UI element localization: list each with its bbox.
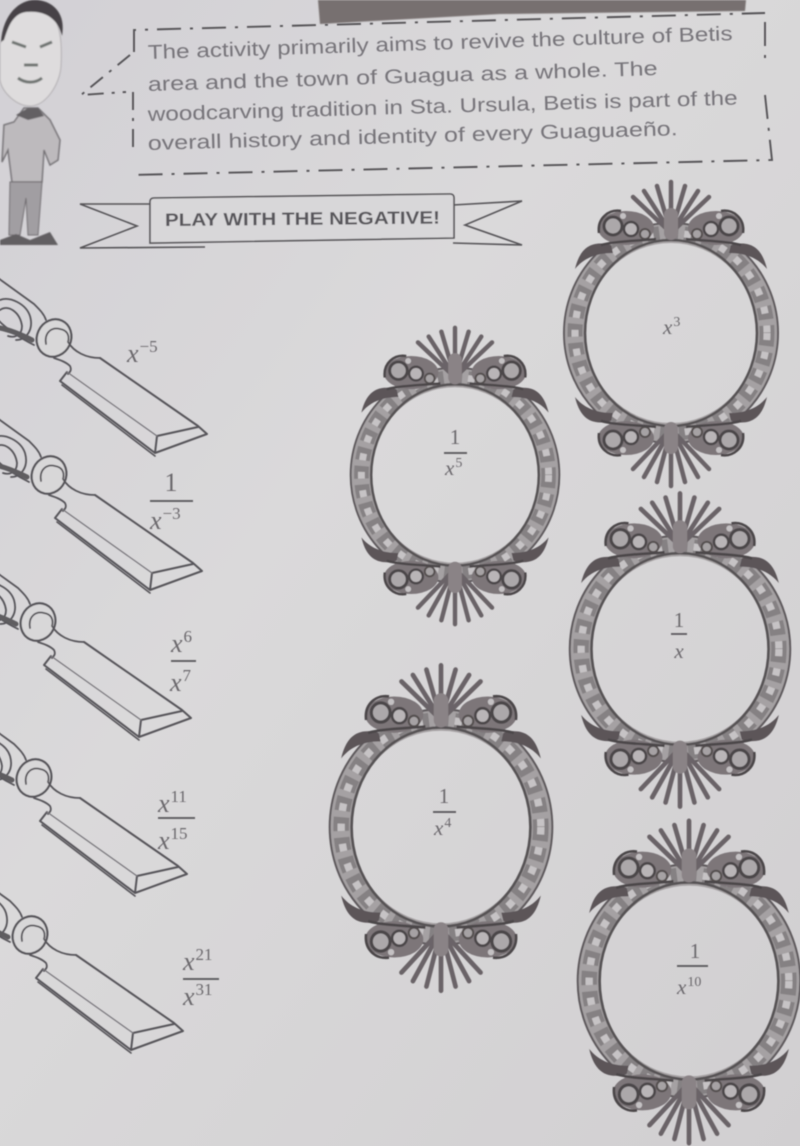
intro paragraph: area and the town of Guagua as a whole. The: [147, 58, 658, 96]
frame with 1/x: 1: [674, 608, 684, 632]
shoes: [0, 232, 58, 245]
frame with 1/x^4: [330, 665, 552, 991]
trousers: [9, 182, 42, 235]
frame with 1/x^10: x: [676, 975, 687, 999]
frame with 1/x^10: 10: [687, 975, 701, 990]
dash-dot speech bubble: [81, 13, 772, 175]
chisel 4 with x^11/x^15: [0, 718, 195, 896]
chisel 1 with x^-5: [0, 278, 207, 456]
chisel 2 with 1/x^-3: x: [149, 506, 162, 535]
chisel 1 with x^-5: x: [126, 339, 139, 368]
frame with 1/x^5: 5: [455, 456, 462, 471]
frame with x^3: x: [662, 315, 673, 339]
frame with 1/x^10: 1: [690, 939, 700, 963]
frame with 1/x^5: [351, 328, 559, 624]
heading ribbon banner: [80, 194, 522, 248]
chisel 4 with x^11/x^15: x: [157, 826, 170, 855]
frame with 1/x^4: 1: [439, 784, 449, 808]
frame with 1/x^5: x: [444, 456, 455, 480]
chisel 3 with x^6/x^7: 7: [183, 666, 192, 685]
frame with 1/x^4: 4: [444, 816, 451, 831]
intro paragraph: [146, 23, 738, 155]
chisel 3 with x^6/x^7: x: [169, 668, 182, 697]
intro paragraph: woodcarving tradition in Sta. Ursula, Betis is part of the: [146, 88, 738, 126]
chisel 5 with x^21/x^31: x: [182, 982, 195, 1011]
chisel 1 with x^-5: −5: [140, 337, 158, 356]
shirt: [2, 108, 60, 182]
hair: [1, 0, 63, 42]
frame with 1/x: [570, 493, 790, 807]
intro paragraph: overall history and identity of every Guaguaeño.: [148, 118, 678, 155]
frame with x^3: [564, 182, 778, 486]
chisel 5 with x^21/x^31: x: [182, 947, 195, 976]
bubble tail: [81, 55, 130, 95]
chisel 2 with 1/x^-3: −3: [163, 504, 181, 523]
chisel 2 with 1/x^-3: 1: [164, 468, 178, 497]
chisel 5 with x^21/x^31: [0, 875, 219, 1053]
heading: PLAY WITH THE NEGATIVE!: [165, 208, 440, 230]
frame with 1/x^10: [578, 821, 800, 1143]
frame with x^3: 3: [673, 315, 680, 330]
chisel 3 with x^6/x^7: [0, 562, 196, 740]
chisel 2 with 1/x^-3: [0, 415, 202, 593]
frame with 1/x: x: [673, 639, 684, 663]
chisel 3 with x^6/x^7: x: [170, 629, 183, 658]
face: [0, 9, 61, 106]
dark photo block at top: [318, 0, 746, 24]
intro paragraph: The activity primarily aims to revive the culture of Betis: [147, 23, 733, 64]
chisel 5 with x^21/x^31: 31: [196, 980, 213, 999]
chisel 5 with x^21/x^31: 21: [196, 945, 213, 964]
facial features: [12, 42, 52, 82]
chisel 4 with x^11/x^15: x: [157, 789, 170, 818]
chisel 4 with x^11/x^15: 11: [171, 787, 187, 806]
frame with 1/x^5: 1: [450, 425, 460, 449]
chisel 3 with x^6/x^7: 6: [184, 627, 192, 646]
caricature of man: [0, 0, 63, 245]
chisel 4 with x^11/x^15: 15: [171, 824, 188, 843]
frame with 1/x^4: x: [433, 816, 444, 840]
